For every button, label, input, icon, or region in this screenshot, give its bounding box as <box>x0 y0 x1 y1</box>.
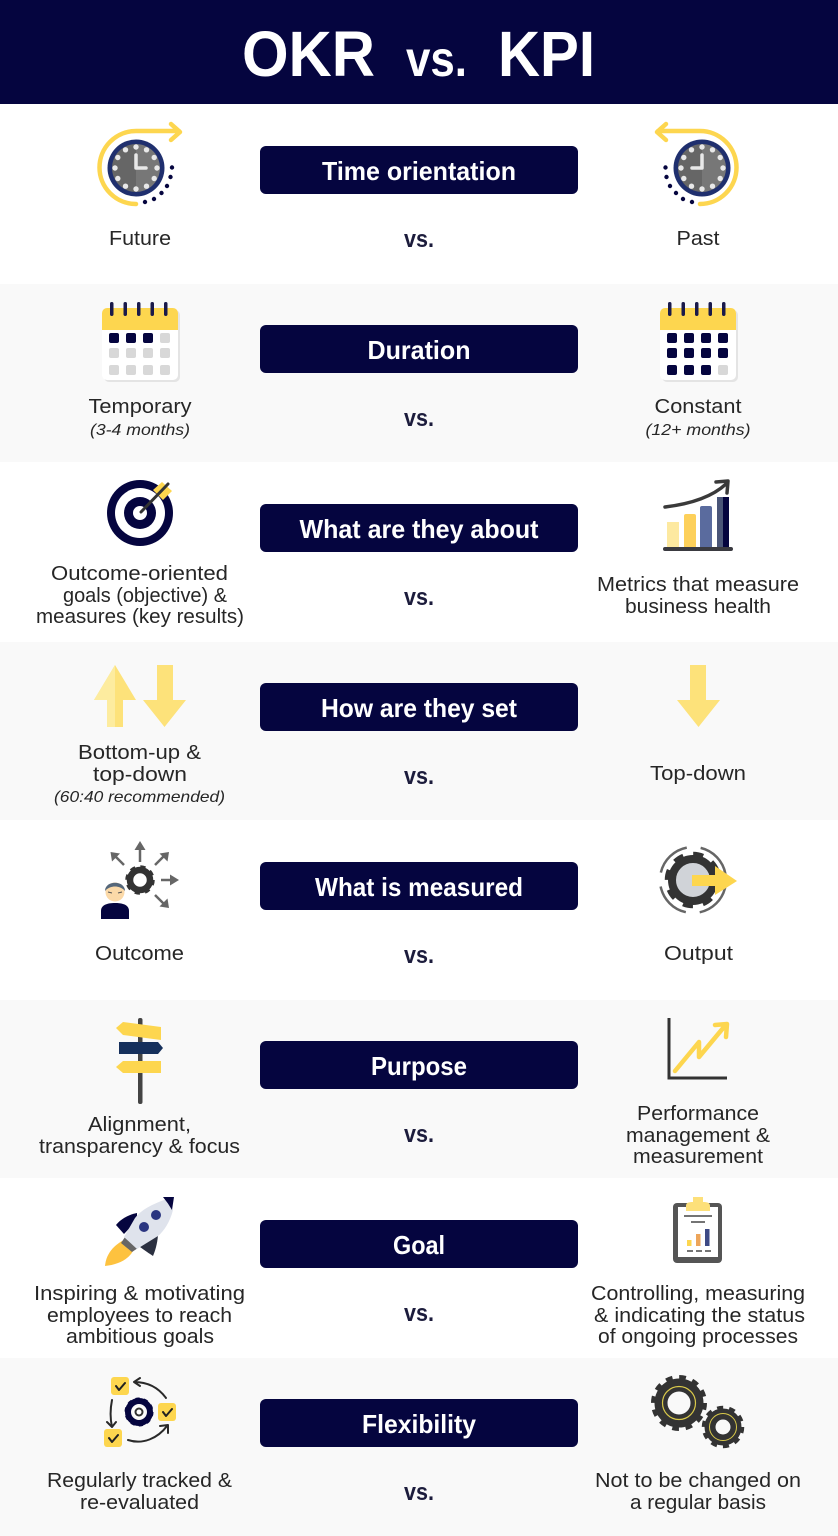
label: metrics: Metrics that measure <box>597 573 799 596</box>
icon: rocket <box>105 1197 174 1266</box>
row: Flexibility <box>47 1377 801 1514</box>
vs label: vs. <box>404 1479 434 1506</box>
label: regularly tracked: re-evaluated <box>80 1491 199 1514</box>
label: inspiring and motivating: ambitious goals <box>66 1325 214 1348</box>
label: bottom-up and top-down: top-down <box>93 763 187 786</box>
title banner: OKR <box>242 18 375 90</box>
heading: What are they about: What are they about <box>300 514 539 544</box>
heading: Purpose: Purpose <box>371 1051 467 1081</box>
label: Temporary: Temporary <box>88 395 192 418</box>
label: Outcome: Outcome <box>95 942 184 965</box>
icon: rising line chart <box>669 1018 727 1078</box>
vs label: vs. <box>404 1300 434 1327</box>
heading: Time orientation: Time orientation <box>322 156 516 186</box>
label: not to be changed: Not to be changed on <box>595 1469 801 1492</box>
heading: What is measured <box>260 862 578 910</box>
heading: Flexibility: Flexibility <box>362 1409 477 1439</box>
label: outcome-oriented goals: Outcome-oriented <box>51 562 228 585</box>
label: performance management: management & <box>626 1124 770 1147</box>
label: regularly tracked: Regularly tracked & <box>47 1469 232 1492</box>
icon: person with gear and arrows <box>101 841 179 919</box>
label: Past: Past <box>676 227 720 250</box>
label: controlling: & indicating the status <box>594 1304 805 1327</box>
row: Goal <box>34 1197 805 1348</box>
label: Temporary: (3-4 months) <box>90 422 190 439</box>
vs label: vs. <box>404 763 434 790</box>
row: How are they set <box>54 665 746 806</box>
label: bottom-up and top-down: Bottom-up & <box>78 741 201 764</box>
icon: target <box>107 480 173 546</box>
label: top-down: Top-down <box>650 762 746 785</box>
label: controlling: Controlling, measuring <box>591 1282 805 1305</box>
icon: down arrow <box>677 665 720 727</box>
icon: review cycle <box>104 1377 176 1447</box>
title banner: vs. <box>406 31 467 87</box>
heading: Purpose <box>260 1041 578 1089</box>
heading: Goal <box>260 1220 578 1268</box>
vs label: vs. <box>404 226 434 253</box>
label: outcome-oriented goals: goals (objective) & <box>63 584 227 607</box>
label: not to be changed: a regular basis <box>630 1491 766 1514</box>
label: controlling <box>591 1282 805 1348</box>
icon: up and down arrows <box>94 665 186 727</box>
icon: rising bar chart <box>663 481 733 551</box>
row: What is measured <box>95 841 737 969</box>
label: regularly tracked <box>47 1469 232 1514</box>
label: outcome-oriented goals: measures (key results) <box>36 605 244 628</box>
label: inspiring and motivating: Inspiring & motivating <box>34 1282 245 1305</box>
label: Constant: (12+ months) <box>646 422 750 439</box>
heading: What is measured: What is measured <box>315 872 523 902</box>
row: Purpose <box>39 1018 770 1168</box>
heading: Flexibility <box>260 1399 578 1447</box>
icon: past clock <box>657 124 736 204</box>
heading: What are they about <box>260 504 578 552</box>
label: metrics <box>597 573 799 618</box>
label: not to be changed <box>595 1469 801 1514</box>
icon: signpost <box>116 1018 163 1104</box>
heading: How are they set <box>260 683 578 731</box>
vs label: vs. <box>404 1121 434 1148</box>
heading: Goal: Goal <box>393 1230 445 1260</box>
label: outcome-oriented goals <box>36 562 244 628</box>
label: controlling: of ongoing processes <box>598 1325 798 1348</box>
label: performance management: measurement <box>633 1145 763 1168</box>
icon: clipboard report <box>673 1197 722 1263</box>
label: inspiring and motivating: employees to reach <box>47 1304 232 1327</box>
label: inspiring and motivating <box>34 1282 245 1348</box>
vs label: vs. <box>404 942 434 969</box>
label: metrics: business health <box>625 595 771 618</box>
heading: Duration <box>260 325 578 373</box>
label: performance management: Performance <box>637 1102 759 1125</box>
heading: How are they set: How are they set <box>321 693 517 723</box>
label: bottom-up and top-down: (60:40 recommended) <box>54 789 225 806</box>
vs label: vs. <box>404 584 434 611</box>
icon: two gears <box>654 1378 742 1446</box>
label: Future: Future <box>109 227 171 250</box>
icon: future clock <box>100 124 180 204</box>
title banner <box>0 0 838 104</box>
label: performance management <box>626 1102 770 1168</box>
label: alignment: transparency & focus <box>39 1135 240 1158</box>
label: Constant <box>646 395 750 439</box>
icon: gear with output arrow <box>660 847 737 913</box>
icon: calendar constant <box>660 302 738 382</box>
icon: calendar temporary <box>102 302 180 382</box>
row: Time orientation <box>100 124 736 253</box>
label: alignment: Alignment, <box>88 1113 191 1136</box>
label: alignment <box>39 1113 240 1158</box>
vs label: vs. <box>404 405 434 432</box>
row: What are they about <box>36 480 799 628</box>
heading: Duration: Duration <box>368 335 470 365</box>
title banner: KPI <box>498 18 595 90</box>
label: Temporary <box>88 395 192 439</box>
label: Output: Output <box>664 942 733 965</box>
label: Constant: Constant <box>654 395 742 418</box>
label: bottom-up and top-down <box>54 741 225 806</box>
heading: Time orientation <box>260 146 578 194</box>
row: Duration <box>88 302 750 439</box>
